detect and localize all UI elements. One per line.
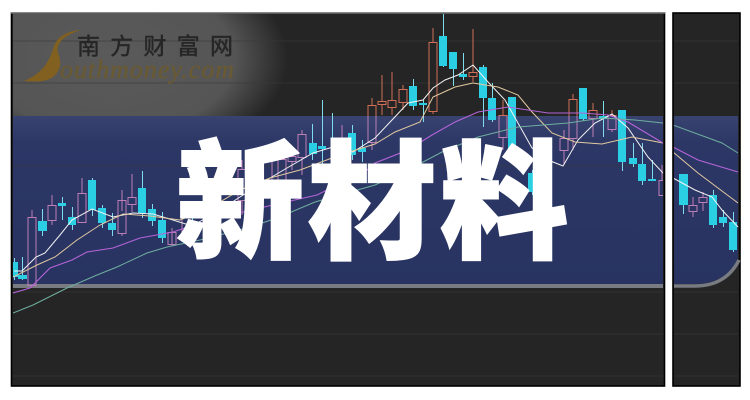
logo chinese name: 南方财富网 bbox=[77, 33, 233, 59]
blue band: right panel with rounded corner bbox=[674, 116, 738, 284]
hollow candles bbox=[28, 28, 707, 286]
band curved edge bbox=[674, 260, 739, 286]
moving average: fast white bbox=[14, 65, 738, 271]
moving average: teal bbox=[13, 118, 738, 313]
panel: right chart background bbox=[673, 13, 740, 386]
cyan wicks bbox=[14, 14, 734, 280]
cyan candle bodies bbox=[10, 36, 737, 279]
moving average: purple bbox=[13, 107, 738, 293]
logo: southmoney bbox=[24, 30, 234, 84]
candlestick chart bbox=[10, 14, 738, 313]
moving average: tan bbox=[13, 83, 738, 277]
logo latin name: outhmoney.com bbox=[60, 55, 234, 84]
logo swoosh bbox=[24, 30, 81, 81]
title: 新材料 bbox=[176, 133, 568, 276]
blue band: main panel bbox=[13, 116, 663, 288]
